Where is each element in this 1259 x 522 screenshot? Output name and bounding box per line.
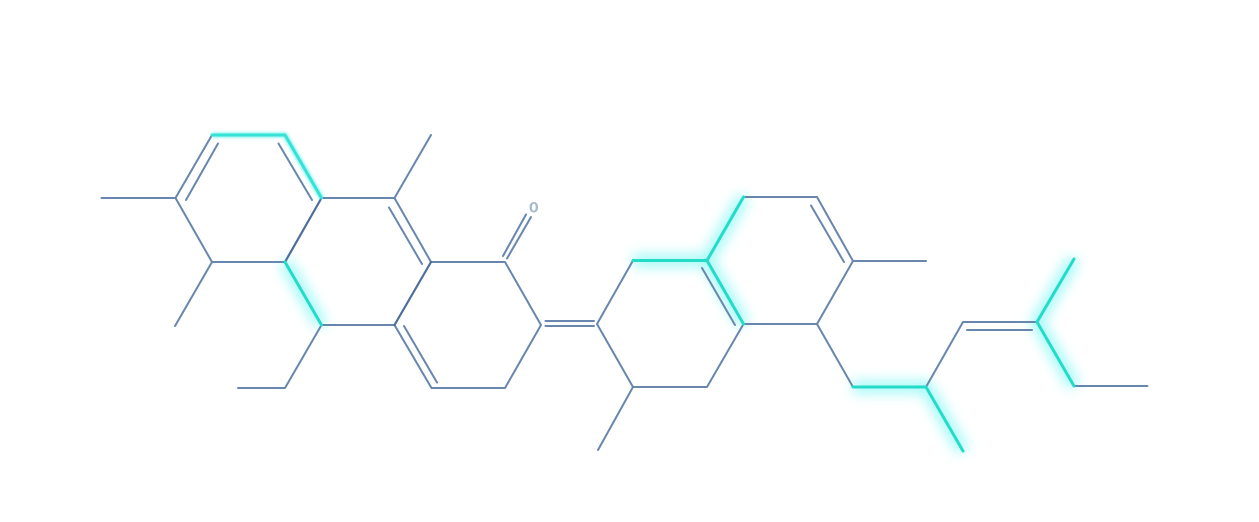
highlight glow halos bbox=[285, 197, 1074, 451]
top highlight glow bbox=[212, 135, 322, 198]
central double bond bbox=[546, 321, 594, 326]
left molecule bonds bbox=[102, 135, 541, 388]
top teal highlighted bonds bbox=[212, 135, 322, 198]
teal highlighted bonds bbox=[285, 197, 1074, 451]
oxygen label: O bbox=[529, 200, 539, 218]
right molecule bonds bbox=[597, 197, 1148, 450]
